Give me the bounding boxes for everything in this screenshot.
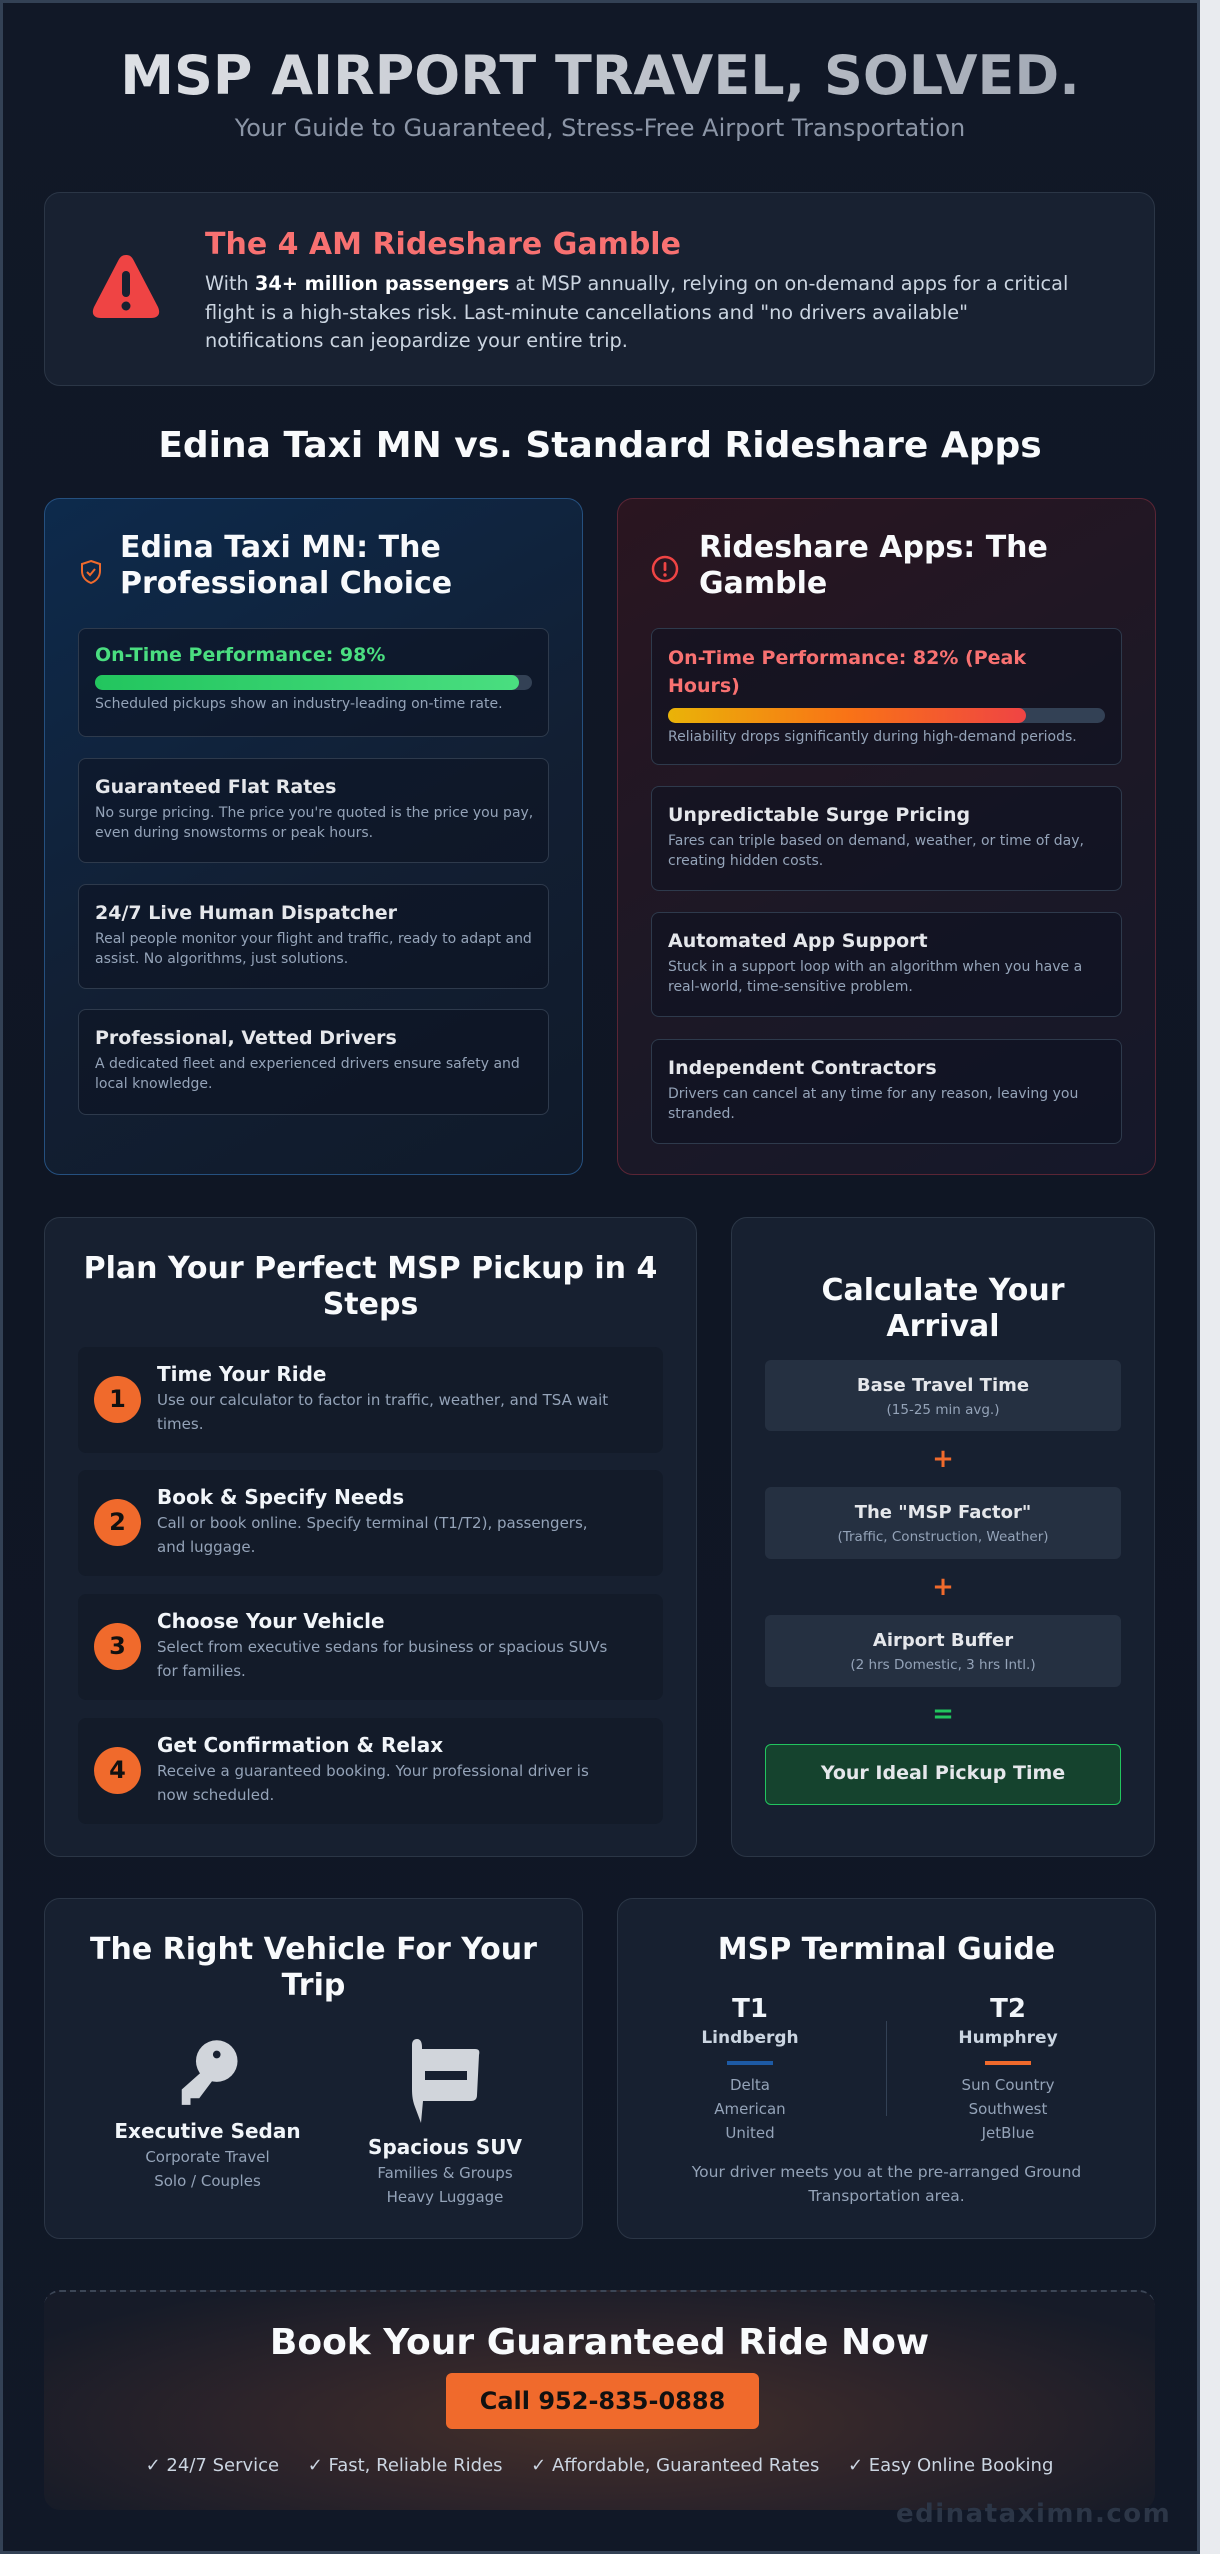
item: contractors: Drivers can cancel at any time for any reason, leaving you <box>668 1086 1078 1102</box>
divider <box>886 2021 887 2116</box>
vehicle: sedan: Corporate Travel <box>145 2148 270 2166</box>
alert text: notifications can jeopardize your entire trip. <box>205 329 628 352</box>
terminal note: Your driver meets you at the pre-arranged Ground Transportation area. <box>692 2163 1081 2205</box>
panel heading <box>120 530 452 601</box>
step 1 <box>78 1347 663 1453</box>
terminal T1: Delta <box>730 2076 770 2094</box>
item: flat rates: Guaranteed Flat Rates <box>95 776 336 798</box>
item: on-time 98: On-Time Performance: 98% <box>95 644 385 666</box>
vehicle: suv: Families & Groups <box>377 2164 513 2182</box>
step 4: 4 <box>109 1756 126 1784</box>
alert text: With 34+ million passengers at MSP annually, relying on on-demand apps for a critical <box>205 272 1068 295</box>
step 2: and luggage. <box>157 1538 255 1556</box>
terminal heading: MSP Terminal Guide <box>718 1932 1055 1967</box>
item: dispatcher: 24/7 Live Human Dispatcher <box>95 902 397 924</box>
plus: + <box>932 1444 954 1474</box>
step 1: 1 <box>109 1385 126 1413</box>
vehicle: sedan: Solo / Couples <box>154 2172 261 2190</box>
box: base travel: Base Travel Time <box>857 1375 1029 1396</box>
box: airport buffer: Airport Buffer <box>873 1630 1013 1651</box>
step 3: 3 <box>109 1632 126 1660</box>
terminal T1: United <box>725 2124 775 2142</box>
item: flat rates: even during snowstorms or peak hours. <box>95 824 373 840</box>
watermark: edinataximn.com <box>896 2499 1171 2529</box>
step 1: times. <box>157 1415 203 1433</box>
call button: Call 952-835-0888 <box>480 2387 725 2415</box>
step 2: Call or book online. Specify terminal (T1/T2), passengers, <box>157 1514 588 1532</box>
icon: warning triangle <box>92 255 160 318</box>
calculator heading: Arrival <box>886 1309 1000 1344</box>
terminal T1: American <box>714 2100 786 2118</box>
terminal T2: Southwest <box>969 2100 1047 2118</box>
step 3: for families. <box>157 1662 246 1680</box>
box: msp factor: The "MSP Factor" <box>855 1502 1031 1523</box>
panel heading: Gamble <box>699 566 827 601</box>
item: app support <box>651 912 1122 1017</box>
box: base travel: (15-25 min avg.) <box>887 1402 999 1418</box>
plus: + <box>932 1572 954 1602</box>
box: airport buffer <box>765 1615 1121 1687</box>
step 4 <box>78 1718 663 1824</box>
alert text <box>205 272 1068 352</box>
calculator heading <box>821 1273 1065 1344</box>
item: app support: real-world, time-sensitive problem. <box>668 978 913 994</box>
box: msp factor: (Traffic, Construction, Weather) <box>837 1529 1049 1545</box>
item: drivers <box>78 1009 549 1115</box>
item: surge: Unpredictable Surge Pricing <box>668 804 970 826</box>
terminal T2: JetBlue <box>982 2124 1034 2142</box>
result box <box>765 1744 1121 1805</box>
icon: shield <box>81 560 101 584</box>
terminal T2: T2 <box>990 1994 1026 2024</box>
alert text: flight is a high-stakes risk. Last-minute cancellations and "no drivers available" <box>205 300 968 324</box>
feature checks: ✓ 24/7 Service ✓ Fast, Reliable Rides ✓ Affordable, Guaranteed Rates ✓ Easy Online Booking <box>146 2455 1053 2476</box>
cta heading: Book Your Guaranteed Ride Now <box>270 2322 929 2363</box>
step 4: Get Confirmation & Relax <box>157 1733 443 1757</box>
terminal T1 <box>701 1994 799 2142</box>
item: drivers: A dedicated fleet and experienced drivers ensure safety and <box>95 1056 520 1072</box>
step 1: Use our calculator to factor in traffic, weather, and TSA wait <box>157 1391 608 1409</box>
item: on-time 82 <box>651 628 1122 765</box>
panel: call to action <box>44 2290 1155 2510</box>
icon: alert circle <box>652 556 678 582</box>
step 4: Receive a guaranteed booking. Your professional driver is <box>157 1762 589 1780</box>
item: surge <box>651 786 1122 891</box>
icon: suv <box>412 2039 480 2123</box>
panel heading: Professional Choice <box>120 566 452 601</box>
subtitle: Your Guide to Guaranteed, Stress-Free Airport Transportation <box>235 114 965 142</box>
terminal T1: T1 <box>732 1994 768 2024</box>
box: base travel <box>765 1360 1121 1431</box>
step 3 <box>78 1594 663 1700</box>
equals: = <box>932 1699 954 1729</box>
item: surge: creating hidden costs. <box>668 852 823 868</box>
steps heading: Plan Your Perfect MSP Pickup in 4 Steps <box>84 1251 657 1322</box>
call button <box>446 2373 759 2429</box>
item: on-time 82: Reliability drops significantly during high-demand periods. <box>668 729 1077 745</box>
vehicle: sedan: Executive Sedan <box>114 2119 301 2143</box>
item: drivers: Professional, Vetted Drivers <box>95 1027 397 1049</box>
item: app support: Automated App Support <box>668 930 928 952</box>
step 2: 2 <box>109 1508 126 1536</box>
step 3: Choose Your Vehicle <box>157 1609 385 1633</box>
step 3: Select from executive sedans for business or spacious SUVs <box>157 1638 607 1656</box>
panel: vehicles <box>44 1898 583 2239</box>
item: on-time 98: Scheduled pickups show an industry-leading on-time rate. <box>95 696 503 712</box>
panel heading <box>699 530 1048 601</box>
calculator heading: Calculate Your <box>821 1273 1065 1308</box>
result box: Your Ideal Pickup Time <box>821 1762 1065 1784</box>
panel: calculator <box>731 1217 1155 1857</box>
alert heading: The 4 AM Rideshare Gamble <box>205 227 681 262</box>
vehicle: suv <box>368 2039 522 2206</box>
title: MSP AIRPORT TRAVEL, SOLVED. <box>120 44 1080 107</box>
item: contractors: Independent Contractors <box>668 1057 937 1079</box>
terminal T1: Lindbergh <box>701 2028 799 2048</box>
panel: Rideshare apps <box>617 498 1156 1175</box>
item: dispatcher <box>78 884 549 989</box>
item: dispatcher: assist. No algorithms, just solutions. <box>95 950 348 966</box>
step 2 <box>78 1470 663 1576</box>
box: airport buffer: (2 hrs Domestic, 3 hrs Intl.) <box>850 1657 1036 1673</box>
vehicle: suv: Spacious SUV <box>368 2135 522 2159</box>
item: contractors <box>651 1039 1122 1144</box>
panel heading: Rideshare Apps: The <box>699 530 1048 565</box>
item: drivers: local knowledge. <box>95 1076 212 1092</box>
vehicle heading: The Right Vehicle For Your Trip <box>90 1932 537 2003</box>
item: app support: Stuck in a support loop with an algorithm when you have a <box>668 959 1082 975</box>
panel heading: Edina Taxi MN: The <box>120 530 441 565</box>
item: surge: Fares can triple based on demand, weather, or time of day, <box>668 833 1084 849</box>
icon: key <box>182 2040 238 2105</box>
step 4: now scheduled. <box>157 1786 274 1804</box>
box: msp factor <box>765 1487 1121 1559</box>
terminal T2: Humphrey <box>958 2028 1058 2048</box>
vehicle: suv: Heavy Luggage <box>387 2188 503 2206</box>
step 1: Time Your Ride <box>157 1362 326 1386</box>
item: on-time 82: On-Time Performance: 82% (Peak <box>668 647 1026 669</box>
panel: rideshare gamble alert <box>44 192 1155 386</box>
item: on-time 82: Hours) <box>668 675 740 697</box>
item: flat rates <box>78 758 549 863</box>
step 2: Book & Specify Needs <box>157 1485 404 1509</box>
terminal T2 <box>958 1994 1058 2142</box>
panel: Edina Taxi <box>44 498 583 1175</box>
item: contractors: stranded. <box>668 1106 735 1122</box>
panel: terminal guide <box>617 1898 1156 2239</box>
panel: 4 steps <box>44 1217 697 1857</box>
vehicle: sedan <box>114 2040 301 2190</box>
terminal T2: Sun Country <box>962 2076 1054 2094</box>
item: on-time 98 <box>78 628 549 737</box>
item: dispatcher: Real people monitor your flight and traffic, ready to adapt and <box>95 931 532 947</box>
heading: comparison: Edina Taxi MN vs. Standard Rideshare Apps <box>158 425 1042 466</box>
item: flat rates: No surge pricing. The price you're quoted is the price you pay, <box>95 805 533 821</box>
